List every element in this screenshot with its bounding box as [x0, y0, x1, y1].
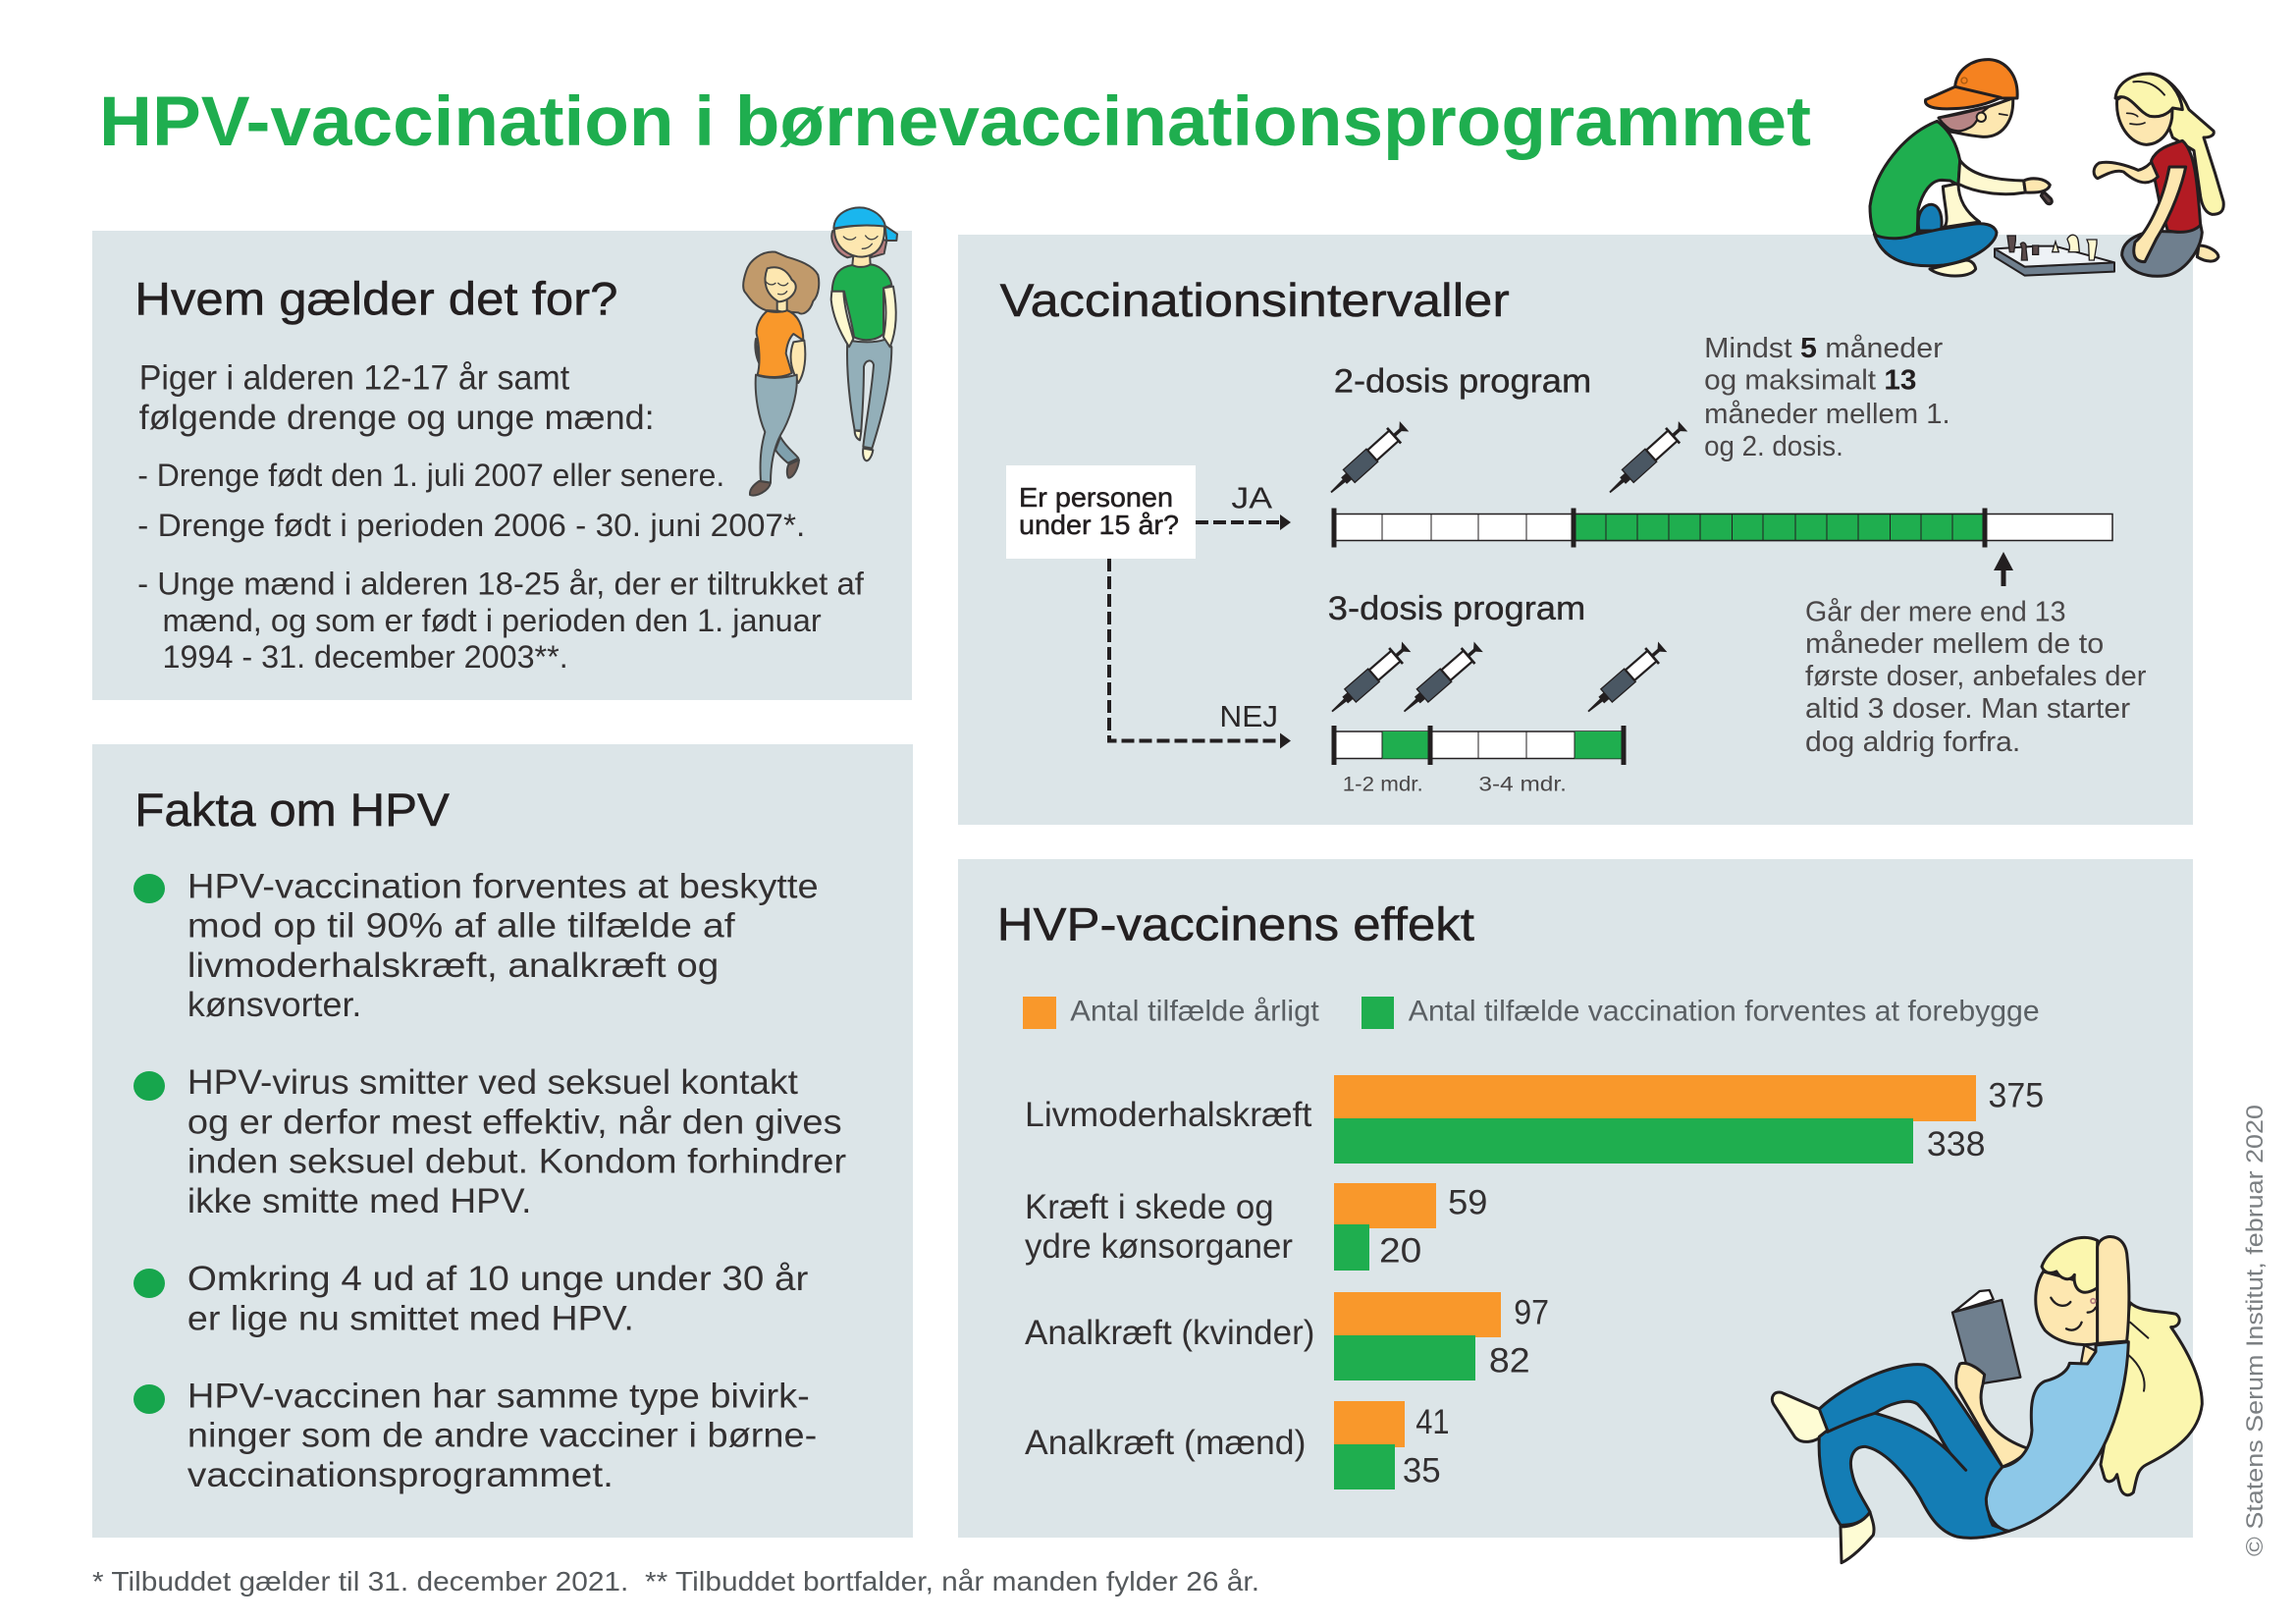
- girl hair top: [2115, 74, 2182, 117]
- note: more than 13 months: måneder mellem de to: [1805, 628, 2104, 660]
- legend: [1023, 996, 2040, 1029]
- text block: facts: HPV-virus smitter ved seksuel kontakt: [187, 1063, 798, 1102]
- title: HPV-vaccination i børnevaccinationsprogrammet: [99, 83, 1811, 161]
- timeline: 2-dosis: [1334, 509, 2112, 548]
- note: 5 to 13 months: og maksimalt 13: [1704, 365, 1916, 397]
- chart labels: Analkræft (kvinder): [1025, 1314, 1314, 1352]
- question box: [1006, 465, 1196, 559]
- illustration: boy and girl playing chess: [1870, 60, 2223, 276]
- text block: facts: mod op til 90% af alle tilfælde af: [187, 907, 735, 946]
- legend: Antal tilfælde vaccination forventes at forebygge: [1409, 996, 2040, 1028]
- icon: syringe 1: [1324, 418, 1412, 500]
- chart labels: ydre kønsorganer: [1025, 1227, 1293, 1266]
- heading: hvp-vaccinens effekt: HVP-vaccinens effekt: [997, 898, 1474, 950]
- text block: facts: ikke smitte med HPV.: [187, 1182, 531, 1220]
- girl pants: [2122, 224, 2202, 276]
- note: 5 to 13 months: og 2. dosis.: [1704, 431, 1843, 462]
- boy cap: [1955, 60, 2017, 98]
- girl hair back: [2150, 74, 2223, 214]
- text block: who: Piger i alderen 12-17 år samt: [139, 359, 569, 398]
- text block: who: [137, 359, 865, 675]
- text block: who: 1994 - 31. december 2003**.: [163, 638, 568, 675]
- girl shirt: [757, 310, 803, 377]
- question box: under 15 år?: [1019, 510, 1179, 540]
- note: more than 13 months: dog aldrig forfra.: [1805, 727, 2020, 758]
- text block: facts: vaccinationsprogrammet.: [187, 1456, 614, 1494]
- girl arms: [2134, 167, 2186, 262]
- book: [1953, 1290, 1994, 1313]
- text block: who: - Drenge født den 1. juli 2007 eller senere.: [137, 457, 724, 493]
- legend: Antal tilfælde årligt: [1070, 996, 1320, 1028]
- label: nej: NEJ: [1219, 700, 1278, 733]
- text block: facts: inden seksuel debut. Kondom forhindrer: [187, 1143, 846, 1181]
- label: 3-4 mdr: 3-4 mdr.: [1478, 771, 1567, 795]
- head: [2036, 1272, 2098, 1345]
- footnote: * Tilbuddet gælder til 31. december 2021. ** Tilbuddet bortfalder, når manden fylder 26 år.: [92, 1566, 1259, 1597]
- girl head: [2117, 88, 2172, 144]
- raised arm: [2098, 1237, 2129, 1343]
- text block: facts: er lige nu smittet med HPV.: [187, 1299, 634, 1337]
- text block: facts: livmoderhalskræft, analkræft og: [187, 947, 719, 985]
- chart values: [1379, 1077, 2044, 1489]
- boy back leg: [1918, 204, 1942, 231]
- text block: facts: Omkring 4 ud af 10 unge under 30 år: [187, 1260, 809, 1298]
- boy arm: [1958, 160, 2025, 194]
- question box: Er personen: [1019, 482, 1173, 513]
- note: more than 13 months: altid 3 doser. Man starter: [1805, 693, 2130, 725]
- chart values: 20: [1379, 1232, 1421, 1271]
- boy head: [834, 225, 884, 257]
- heading: 2-dosis program: 2-dosis program: [1334, 363, 1591, 401]
- icon: syringe 3: [1325, 639, 1414, 720]
- boy foot: [1930, 260, 1976, 276]
- bar chart: [1025, 1075, 2044, 1489]
- girl hair: [743, 251, 819, 314]
- panel: hvem gælder det for: [92, 231, 912, 700]
- text block: facts: ninger som de andre vacciner i børne-: [187, 1417, 817, 1455]
- chart values: 59: [1448, 1183, 1487, 1221]
- text block: facts: [187, 867, 846, 1494]
- text block: who: mænd, og som er født i perioden den 1. januar: [163, 602, 822, 638]
- note: more than 13 months: første doser, anbefales der: [1805, 661, 2147, 692]
- panel: fakta om hpv: [92, 744, 913, 1538]
- hair back: [2101, 1303, 2202, 1495]
- boy hair: [831, 229, 886, 257]
- icon: syringe 4: [1398, 639, 1485, 720]
- illustration: two teenagers walking: [743, 207, 897, 496]
- heading: hvem gælder det for: Hvem gælder det for?: [134, 273, 617, 325]
- timeline: 3-dosis: [1334, 726, 1624, 765]
- note: 5 to 13 months: Mindst 5 måneder: [1704, 333, 1943, 364]
- arrow: up: [1994, 552, 2013, 586]
- chart values: 35: [1403, 1451, 1441, 1489]
- panel: vaccinationsintervaller: [958, 235, 2193, 825]
- boy shirt: [832, 264, 891, 340]
- text block: facts: HPV-vaccinen har samme type bivirk-: [187, 1377, 810, 1415]
- boy arms: [831, 292, 853, 347]
- chart labels: Analkræft (mænd): [1025, 1424, 1306, 1462]
- boy feet: [855, 430, 861, 440]
- chart values: 338: [1927, 1125, 1985, 1164]
- arrow: ja: [1196, 514, 1291, 530]
- face: [2051, 1298, 2096, 1330]
- chess board: [1995, 248, 2114, 276]
- body: [1986, 1342, 2128, 1531]
- note: more than 13 months: Går der mere end 13: [1805, 596, 2066, 627]
- boy lower arm: [1943, 184, 1980, 228]
- legs: [1819, 1365, 2009, 1538]
- text block: facts: HPV-vaccination forventes at beskytte: [187, 867, 819, 905]
- girl pants: [756, 375, 797, 483]
- heading: vaccinationsintervaller: Vaccinationsintervaller: [1000, 274, 1510, 326]
- hair top: [2042, 1237, 2098, 1292]
- chart labels: Kræft i skede og: [1025, 1188, 1274, 1226]
- text block: facts: og er derfor mest effektiv, når den gives: [187, 1103, 842, 1141]
- icon: syringe 2: [1603, 418, 1690, 500]
- illustration: girl reading: [1772, 1237, 2202, 1563]
- boy pants: [847, 339, 891, 449]
- heading: fakta om hpv: Fakta om HPV: [134, 784, 451, 836]
- heading: 3-dosis program: 3-dosis program: [1328, 590, 1585, 627]
- note: 5 to 13 months: måneder mellem 1.: [1704, 399, 1950, 430]
- chart values: 82: [1489, 1342, 1530, 1380]
- text block: who: følgende drenge og unge mænd:: [139, 399, 655, 437]
- arm: [1956, 1363, 2029, 1467]
- girl arm: [791, 341, 805, 383]
- chess pieces: [2007, 235, 2097, 260]
- boy shirt: [1870, 121, 1960, 239]
- girl shoes and back leg: [775, 437, 798, 463]
- chart labels: Livmoderhalskræft: [1025, 1096, 1312, 1134]
- bullets: [133, 874, 165, 1414]
- boy cap: [833, 207, 897, 241]
- label: 1-2 mdr: 1-2 mdr.: [1343, 771, 1423, 795]
- boy legs: [1874, 224, 1997, 266]
- chart values: 97: [1514, 1293, 1549, 1331]
- chart labels: [1025, 1096, 1314, 1462]
- feet: [1772, 1392, 1828, 1441]
- arrow: nej: [1109, 559, 1291, 748]
- label: ja: JA: [1231, 482, 1273, 515]
- boy head: [1939, 98, 2013, 136]
- icon: syringe 5: [1581, 639, 1670, 720]
- text block: who: - Unge mænd i alderen 18-25 år, der er tiltrukket af: [137, 566, 865, 602]
- chart values: 41: [1415, 1403, 1450, 1441]
- text block: facts: kønsvorter.: [187, 986, 361, 1024]
- girl shirt: [2152, 140, 2201, 232]
- girl head: [777, 299, 787, 311]
- note: more than 13 months: [1805, 596, 2147, 758]
- neck: [2081, 1345, 2098, 1368]
- text block: who: - Drenge født i perioden 2006 - 30. juni 2007*.: [137, 507, 805, 543]
- chart values: 375: [1988, 1077, 2044, 1115]
- note: 5 to 13 months: [1704, 333, 1950, 462]
- copyright: © Statens Serum Institut, februar 2020: [2242, 1105, 2269, 1556]
